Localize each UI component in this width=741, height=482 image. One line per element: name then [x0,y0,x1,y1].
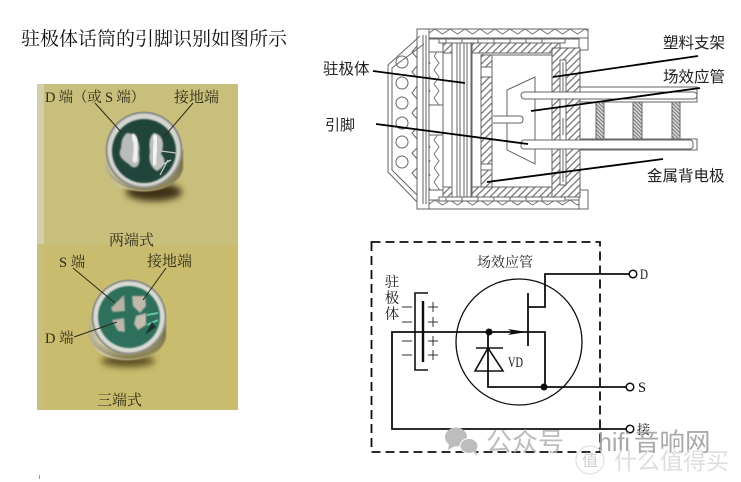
terminal ground: 接 [637,422,650,437]
terminal ground [626,422,650,437]
label: FET heading: 场效应管 [477,254,533,271]
diagram: circuit schematic [372,242,650,452]
watermark: official account: 公众号 [486,427,564,457]
watermark: logo circle: 值 [582,452,598,470]
diode symbol [475,348,503,371]
watermark: SMZDM: 什么值得买 [614,448,729,474]
label: electret vertical: 驻 [385,274,400,291]
FET circle [456,279,582,405]
terminal D: D [640,267,648,283]
electret plates and charges [402,293,438,370]
label: D terminal or S terminal: D 端（或 S 端） [45,89,145,106]
label: S terminal: S 端 [59,254,86,271]
label: ground terminal, three-terminal type: 接地端 [147,252,192,270]
diagram: microphone cross-section [323,29,725,209]
caption: two-terminal type: 两端式 [109,232,154,249]
label: VD: VD [508,355,523,371]
label: electret: 驻极体 [323,60,370,78]
label: electret vertical: 极 [385,289,400,307]
label: pins: 引脚 [325,117,355,134]
photo: three-terminal microphone [45,252,192,367]
watermark: hifi: hifi [598,427,630,457]
leader lines [95,103,193,138]
terminal S [626,380,646,396]
watermark [445,427,729,474]
watermark: logo circle [576,446,604,474]
label: metal back electrode: 金属背电极 [647,167,725,185]
title: 驻极体话筒的引脚识别如图所示 [21,27,288,50]
label: D terminal: D 端 [45,330,74,347]
small tick mark [39,475,40,479]
label: plastic bracket: 塑料支架 [663,34,725,52]
leader lines, three-terminal type [73,268,166,337]
icon: WeChat bubbles [445,428,478,456]
terminal D [629,267,648,283]
caption: three-terminal type: 三端式 [97,392,142,409]
leader lines [373,56,700,182]
label: electret vertical [385,274,400,323]
label: electret vertical: 体 [385,306,400,323]
label: FET: 场效应管 [663,67,725,86]
watermark: audio site: 音响网 [634,429,711,457]
junction dots and arrow [486,328,548,390]
panel: photos of microphone terminals [37,84,238,410]
terminal S: S [638,380,646,396]
photo: two-terminal microphone [45,88,219,201]
dashed boundary [372,242,600,452]
label: ground terminal: 接地端 [174,88,219,106]
housing and shell [388,29,697,209]
circuit wires [392,274,630,429]
